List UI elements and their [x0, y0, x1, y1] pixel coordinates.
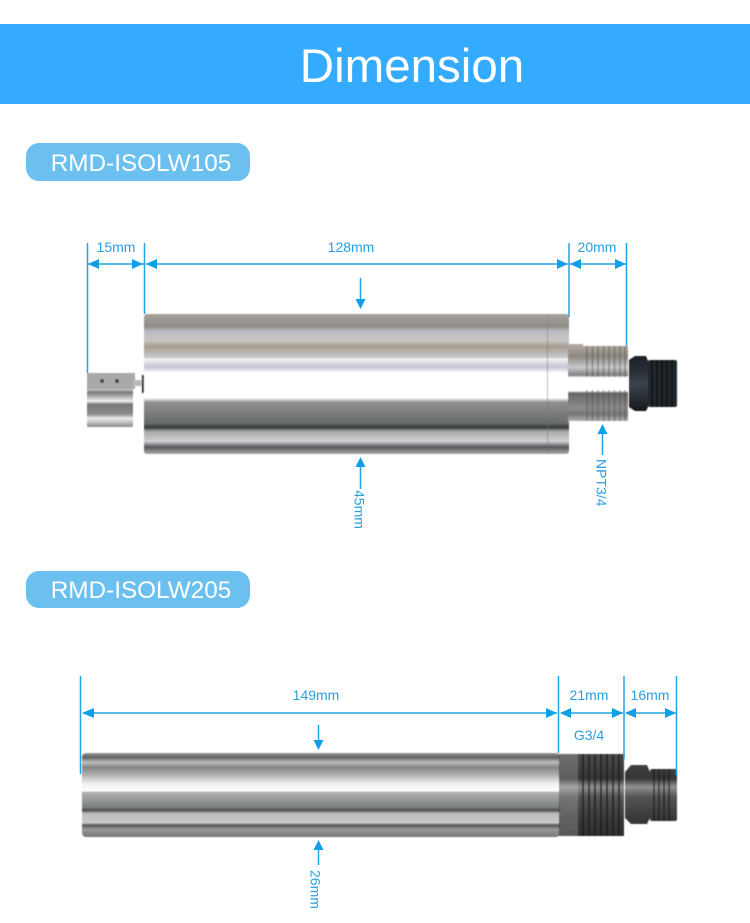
- dimension: 20mm: [569, 239, 626, 346]
- model label: RMD-ISOLW105: [26, 143, 250, 181]
- dimension: 26mm: 26mm: [308, 870, 324, 909]
- model label: RMD-ISOLW105: RMD-ISOLW105: [51, 150, 231, 177]
- sensor photo: RMD-ISOLW105: [87, 314, 677, 454]
- dimension: 16mm: 16mm: [631, 687, 669, 703]
- label: G3/4: G3/4: [574, 727, 604, 743]
- dimension: 20mm: 20mm: [578, 239, 616, 255]
- dimension: 26mm: [308, 725, 324, 909]
- dimension: 45mm: [352, 278, 368, 529]
- cylinder body: [82, 753, 560, 837]
- dimension: 149mm: 149mm: [293, 687, 339, 703]
- cylinder body: [144, 314, 569, 454]
- dimension: 128mm: 128mm: [328, 239, 374, 255]
- black cable plug: [629, 356, 677, 411]
- dimension: 149mm: [80, 676, 558, 774]
- model label: RMD-ISOLW205: [26, 571, 250, 608]
- dimension: 16mm: [625, 676, 676, 775]
- dimension: 45mm: 45mm: [352, 490, 368, 529]
- black coupling and plug: [625, 765, 677, 824]
- dimension: 15mm: 15mm: [97, 239, 135, 255]
- dimension: 21mm: 21mm: [570, 687, 608, 703]
- title: Dimension: [300, 40, 524, 93]
- dimension: 15mm: [88, 239, 144, 373]
- dimension: NPT3/4: [594, 424, 610, 507]
- dimension: 21mm: [560, 676, 624, 759]
- model label: RMD-ISOLW205: RMD-ISOLW205: [51, 577, 231, 604]
- dimension: 128mm: [146, 239, 568, 269]
- sensor tip: [87, 373, 145, 427]
- threaded connector: [568, 344, 628, 421]
- header banner: [0, 24, 750, 104]
- dimension: NPT3/4: NPT3/4: [594, 459, 610, 507]
- sensor photo: RMD-ISOLW205: [82, 753, 677, 837]
- dark threaded section: [559, 754, 624, 836]
